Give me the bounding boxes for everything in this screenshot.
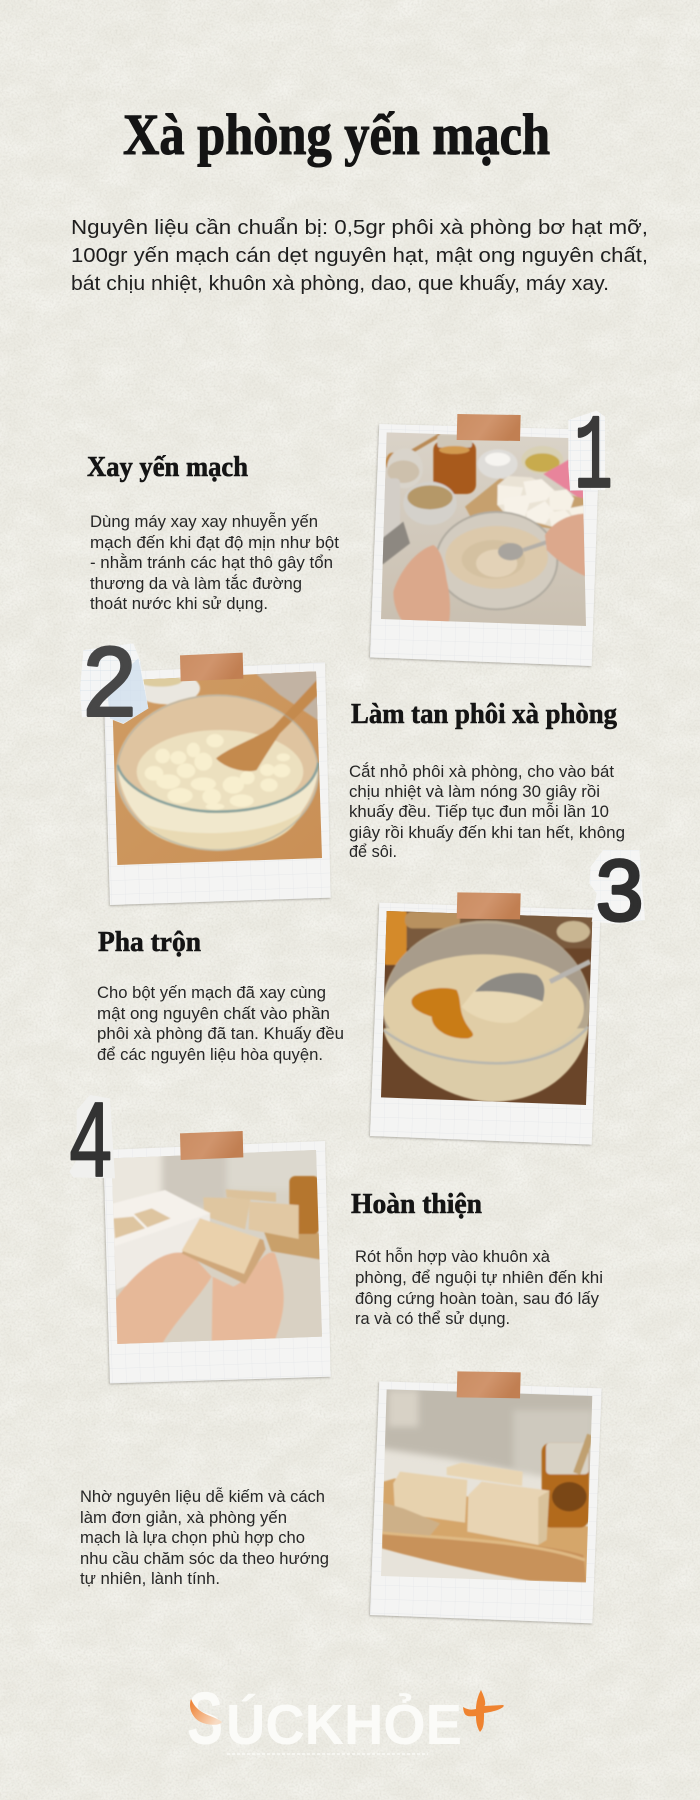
photo — [107, 667, 327, 870]
step 3 text — [97, 984, 344, 1064]
logo: Sức Khỏe+ — [187, 1677, 504, 1760]
step number 1 — [568, 400, 613, 519]
ingredients paragraph: 100gr yến mạch cán dẹt nguyên hạt, mật ong nguyên chất, — [71, 245, 648, 267]
polaroid 3: mixing — [370, 892, 601, 1145]
ingredients paragraph — [71, 217, 648, 295]
step number 2: 2 — [83, 626, 136, 736]
closing paragraph: tự nhiên, lành tính. — [80, 1570, 220, 1588]
logo wordmark: S — [187, 1677, 223, 1760]
step 3 heading: Pha trộn — [98, 926, 201, 958]
step 1 text: mạch đến khi đạt độ mịn như bột — [90, 534, 339, 552]
photo — [112, 1150, 322, 1344]
title: Xà phòng yến mạch — [123, 102, 550, 167]
step 4 text — [355, 1247, 603, 1328]
logo wordmark — [187, 1677, 462, 1760]
frame — [103, 1141, 331, 1383]
photo — [378, 908, 595, 1108]
ingredients paragraph: bát chịu nhiệt, khuôn xà phòng, dao, que khuấy, máy xay. — [71, 273, 609, 295]
frame — [370, 903, 601, 1145]
step number 4: 4 — [69, 1081, 112, 1199]
photo — [377, 430, 591, 630]
step 3 text: mật ong nguyên chất vào phần — [97, 1005, 330, 1023]
step 1 heading: Xay yến mạch — [87, 451, 248, 483]
logo tagline rule — [227, 1753, 428, 1755]
step 4 text: đông cứng hoàn toàn, sau đó lấy — [355, 1290, 600, 1308]
step 3 text: Cho bột yến mạch đã xay cùng — [97, 984, 326, 1002]
step 2 text — [349, 762, 625, 861]
tape — [180, 653, 243, 681]
polaroid 2: melting soap — [103, 653, 331, 905]
step 2 text: giây rồi khuấy đến khi tan hết, không — [349, 824, 625, 842]
step 3 text: để các nguyên liệu hòa quyện. — [97, 1046, 323, 1064]
closing paragraph: nhu cầu chăm sóc da theo hướng — [80, 1550, 329, 1568]
polaroid 1: grinding oats — [370, 414, 600, 666]
step 4 text: ra và có thể sử dụng. — [355, 1310, 510, 1328]
frame — [103, 662, 331, 905]
step 1 text: thoát nước khi sử dụng. — [90, 595, 268, 613]
step 1 text — [90, 512, 339, 613]
logo wordmark: ÚCKHỎE — [226, 1692, 462, 1757]
step 2 text: Cắt nhỏ phôi xà phòng, cho vào bát — [349, 762, 614, 781]
step number 3: 3 — [596, 843, 643, 939]
ingredients paragraph: Nguyên liệu cần chuẩn bị: 0,5gr phôi xà phòng bơ hạt mỡ, — [71, 217, 648, 239]
step 4 text: phòng, để nguội tự nhiên đến khi — [355, 1269, 603, 1287]
tape — [457, 892, 521, 919]
tape — [180, 1131, 243, 1160]
step 1 text: thương da và làm tắc đường — [90, 574, 302, 593]
tape — [457, 1371, 521, 1398]
step number 1: 1 — [574, 400, 613, 519]
step 4 text: Rót hỗn hợp vào khuôn xà — [355, 1247, 551, 1266]
step 2 text: khuấy đều. Tiếp tục đun mỗi lần 10 — [349, 802, 609, 821]
step 1 text: Dùng máy xay xay nhuyễn yến — [90, 512, 318, 531]
logo S swoosh — [190, 1699, 222, 1725]
step 4 heading: Hoàn thiện — [351, 1188, 482, 1220]
closing paragraph: Nhờ nguyên liệu dễ kiếm và cách — [80, 1487, 325, 1506]
closing paragraph — [80, 1487, 329, 1588]
step 3 text: phôi xà phòng đã tan. Khuấy đều — [97, 1025, 344, 1043]
frame — [370, 424, 600, 666]
logo plus — [463, 1690, 504, 1732]
closing paragraph: mạch là lựa chọn phù hợp cho — [80, 1529, 305, 1547]
closing paragraph: làm đơn giản, xà phòng yến — [80, 1509, 287, 1527]
frame — [370, 1381, 602, 1623]
tape — [457, 414, 521, 441]
step 2 text: chịu nhiệt và làm nóng 30 giây rồi — [349, 783, 600, 801]
step 2 text: để sôi. — [349, 843, 397, 861]
polaroid 4: finished bar in hands — [103, 1131, 331, 1383]
polaroid 5: finished soap bars — [370, 1371, 602, 1623]
photo — [378, 1385, 597, 1590]
step 2 heading: Làm tan phôi xà phòng — [351, 698, 617, 730]
step 1 text: - nhằm tránh các hạt thô gây tổn — [90, 553, 333, 572]
